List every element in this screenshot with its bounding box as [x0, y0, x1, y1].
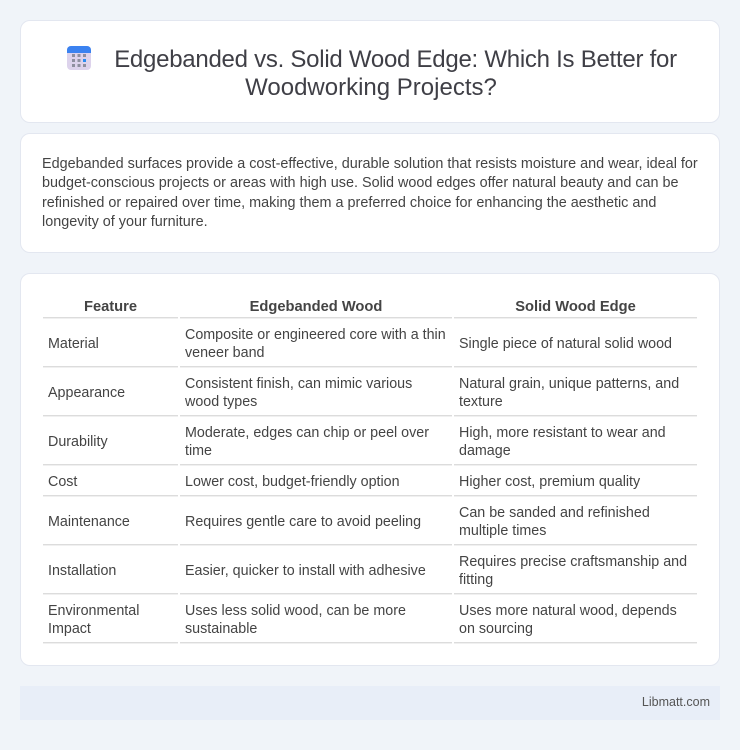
comparison table: Uses less solid wood, can be more — [185, 603, 406, 619]
row: Cost: Cost — [48, 474, 77, 490]
comparison table: time — [185, 443, 212, 459]
icon: calendar — [67, 46, 91, 70]
comparison table: sustainable — [185, 621, 257, 637]
panel: comparison table card — [20, 273, 720, 666]
comparison table: Single piece of natural solid wood — [459, 336, 672, 352]
comparison table: Higher cost, premium quality — [459, 474, 640, 490]
comparison table: Uses more natural wood, depends — [459, 603, 677, 619]
row: Environmental Impact — [48, 603, 139, 637]
row: Environmental Impact: Environmental — [48, 603, 139, 619]
row: Environmental Impact: Impact — [48, 621, 91, 637]
summary text: longevity of your furniture. — [42, 214, 208, 230]
summary text: budget-conscious projects or areas with high use. Solid wood edges offer natural beauty and can be — [42, 175, 679, 191]
comparison table: Natural grain, unique patterns, and — [459, 376, 679, 392]
footer brand: Libmatt.com — [642, 695, 710, 709]
row: Appearance: Appearance — [48, 385, 125, 401]
comparison table: Easier, quicker to install with adhesive — [185, 563, 426, 579]
summary text — [42, 156, 698, 230]
footer bar — [20, 686, 720, 720]
summary text: refinished or repaired over time, making them a preferred choice for enhancing the aesthetic and — [42, 195, 656, 211]
title — [114, 46, 677, 101]
comparison table: on sourcing — [459, 621, 533, 637]
comparison table: High, more resistant to wear and — [459, 425, 666, 441]
header: Solid Wood Edge: Solid Wood Edge — [515, 299, 636, 315]
comparison table: Requires precise craftsmanship and — [459, 554, 687, 570]
row: Durability: Durability — [48, 434, 108, 450]
comparison table: damage — [459, 443, 511, 459]
comparison table: Requires gentle care to avoid peeling — [185, 514, 421, 530]
comparison table: Consistent finish, can mimic various — [185, 376, 412, 392]
comparison table: wood types — [185, 394, 257, 410]
header: Edgebanded Wood: Edgebanded Wood — [250, 299, 382, 315]
comparison table — [43, 299, 697, 644]
comparison table: multiple times — [459, 523, 546, 539]
comparison table: Moderate, edges can chip or peel over — [185, 425, 429, 441]
comparison table: Lower cost, budget-friendly option — [185, 474, 400, 490]
title: Edgebanded vs. Solid Wood Edge: Which Is Better for — [114, 46, 677, 73]
summary text: Edgebanded surfaces provide a cost-effective, durable solution that resists moisture and wear, ideal for — [42, 156, 698, 172]
comparison table: Composite or engineered core with a thin — [185, 327, 446, 343]
title: Woodworking Projects? — [245, 74, 497, 101]
comparison table: fitting — [459, 572, 493, 588]
header: Feature: Feature — [84, 299, 137, 315]
row: Maintenance: Maintenance — [48, 514, 130, 530]
panel: summary card — [20, 133, 720, 253]
row: Material: Material — [48, 336, 99, 352]
comparison table: Can be sanded and refinished — [459, 505, 650, 521]
panel: title card — [20, 20, 720, 123]
row: Installation: Installation — [48, 563, 116, 579]
comparison table: texture — [459, 394, 503, 410]
comparison table: veneer band — [185, 345, 264, 361]
